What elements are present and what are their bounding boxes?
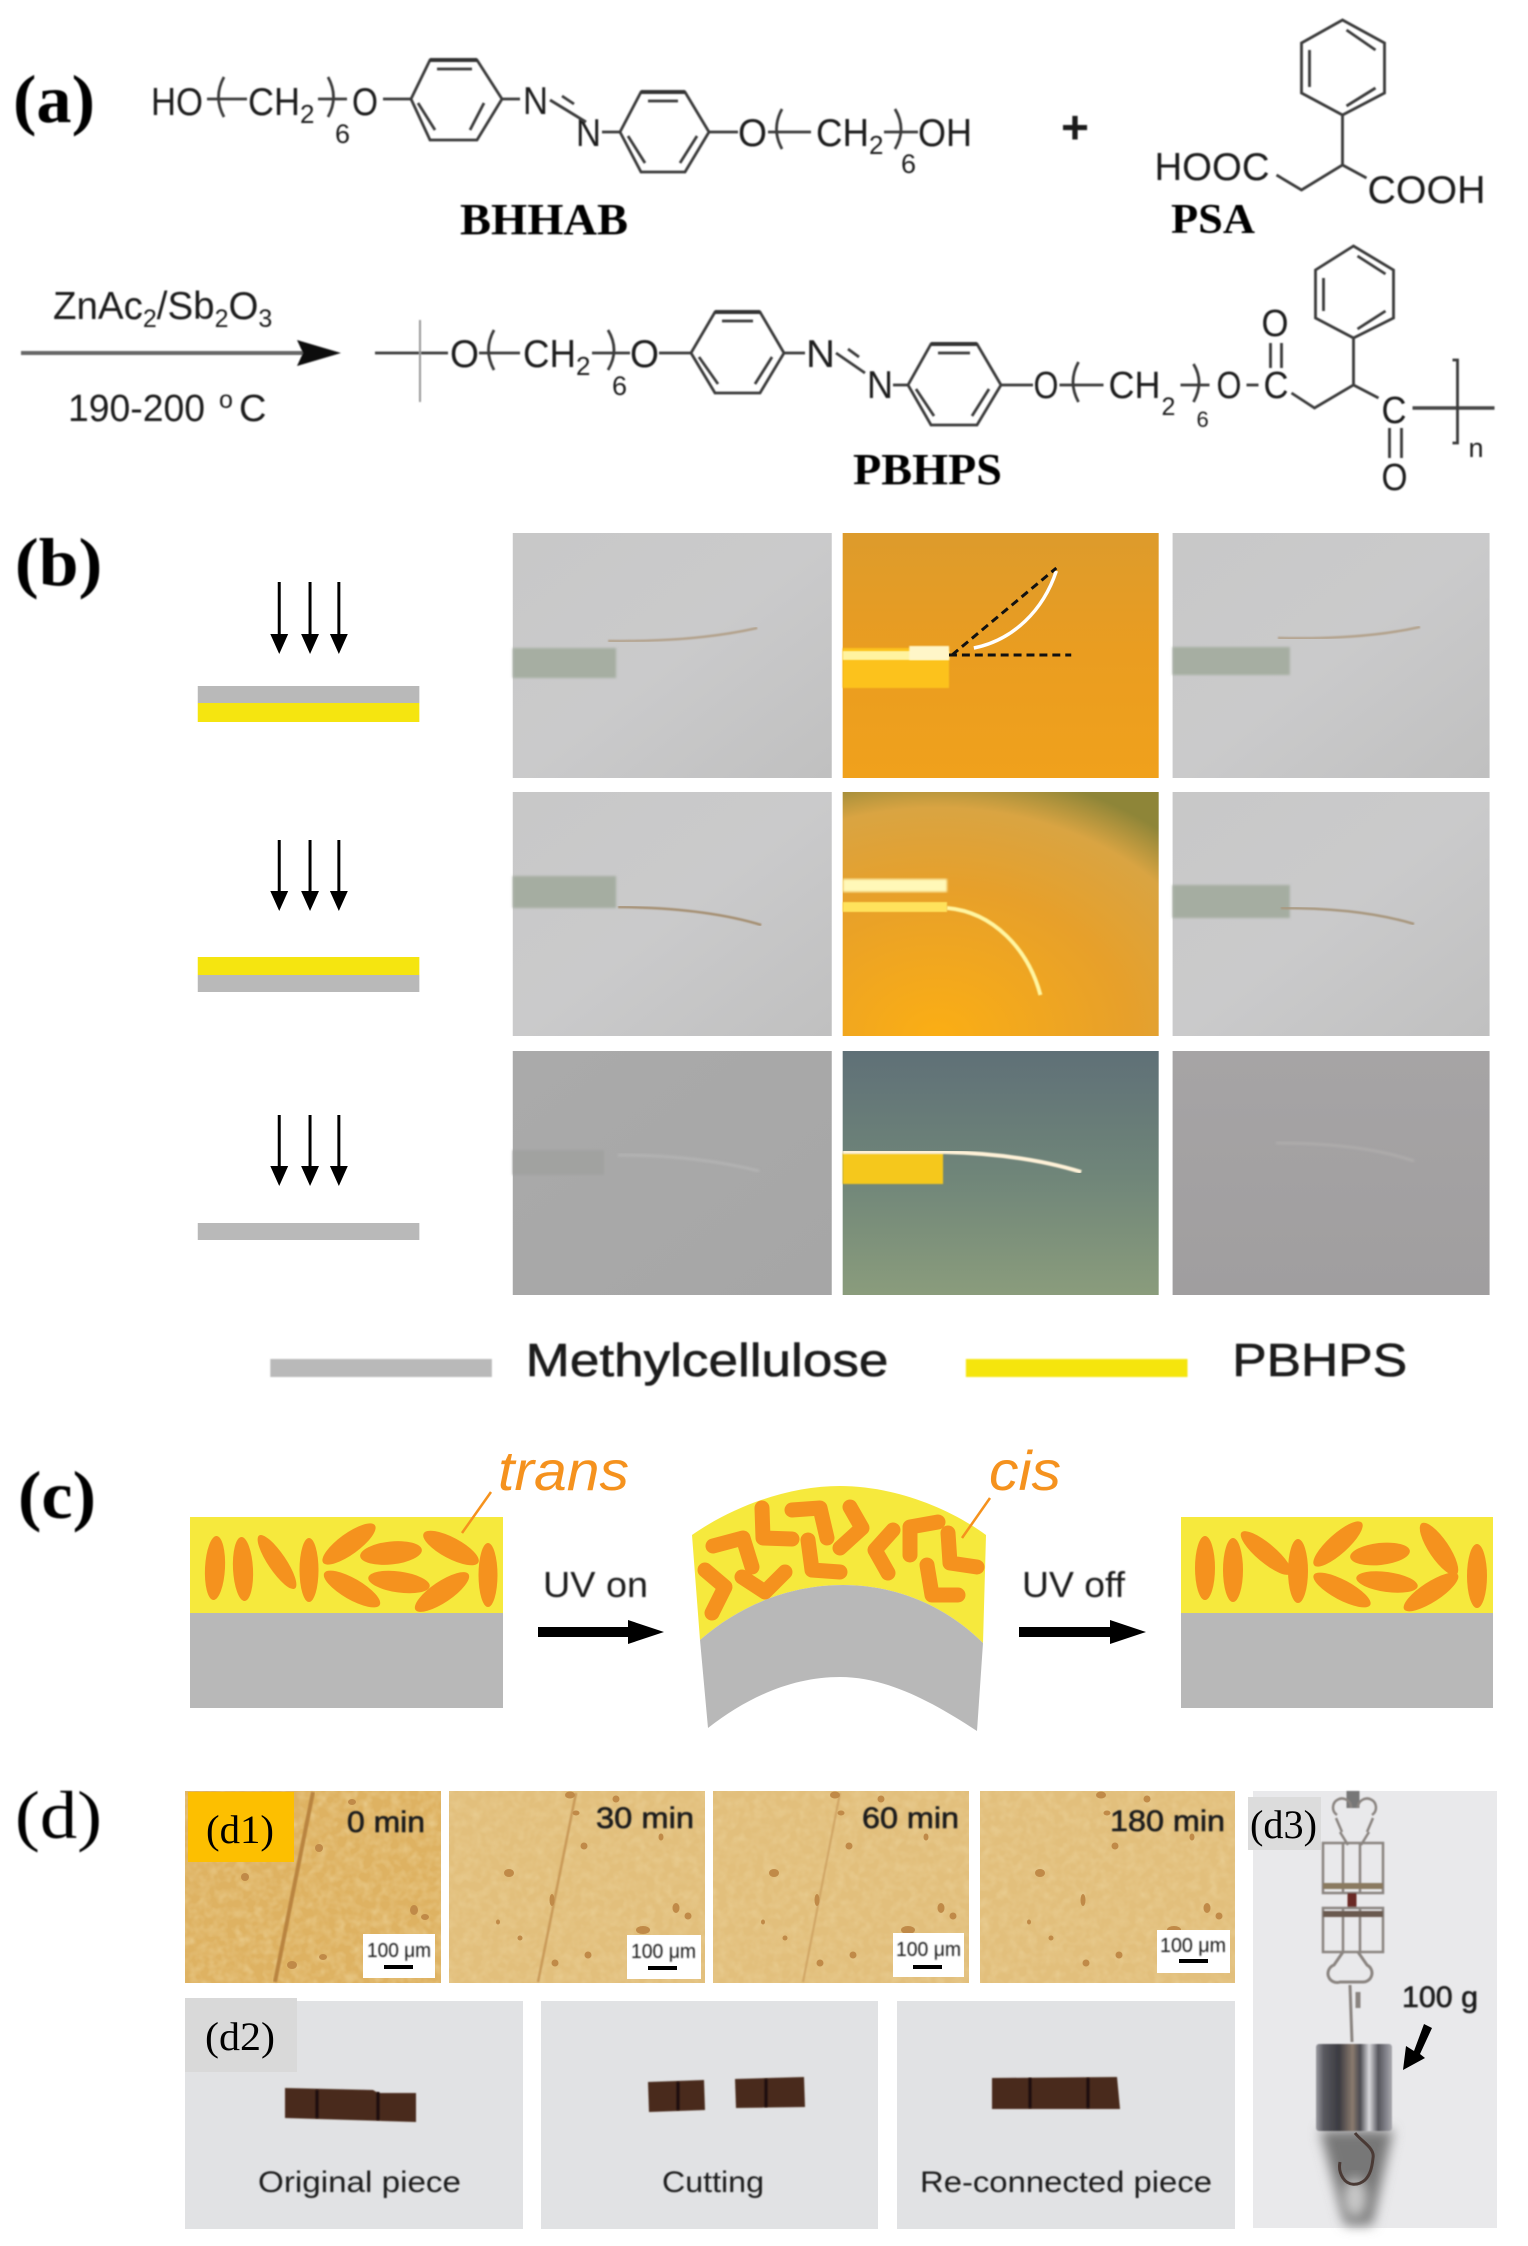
d1 micrograph 180 min <box>980 1791 1235 1983</box>
PBHPS structure <box>375 246 1494 499</box>
label trans with leader: trans <box>498 1439 629 1502</box>
panel d: self-healing <box>15 1777 1497 2229</box>
label PBHPS: PBHPS <box>853 445 1002 494</box>
PBHPS structure: O <box>1034 365 1058 407</box>
reaction arrow and conditions: 2 <box>143 305 157 333</box>
legend <box>270 1334 1407 1386</box>
BHHAB structure: 6 <box>335 119 350 149</box>
reaction arrow and conditions <box>21 285 341 430</box>
photo row 3 right <box>1173 1051 1490 1295</box>
reaction arrow and conditions: 2 <box>215 305 228 333</box>
label BHHAB: BHHAB <box>460 195 628 244</box>
UV on arrow <box>538 1564 664 1644</box>
reaction arrow and conditions: o <box>219 386 233 414</box>
UV on arrow: UV on <box>543 1564 648 1605</box>
BHHAB structure: N <box>523 80 548 123</box>
panel a: synthesis scheme <box>13 20 1494 499</box>
photo row 3 left <box>513 1051 832 1295</box>
label cis with leader: cis <box>989 1439 1061 1502</box>
BHHAB structure: O <box>738 112 767 155</box>
BHHAB structure: 2 <box>300 99 314 129</box>
plus sign: + <box>1061 101 1089 153</box>
reaction arrow and conditions: ZnAc <box>53 285 143 328</box>
BHHAB structure: 2 <box>869 130 883 160</box>
d2 cutting <box>541 2001 878 2229</box>
PBHPS structure: 2 <box>576 351 590 381</box>
d3 weight test photo: 100 g <box>1402 1981 1478 2014</box>
PBHPS structure: n <box>1468 433 1484 463</box>
reaction arrow and conditions: /Sb <box>157 285 215 328</box>
d2 cutting: Cutting <box>662 2166 764 2199</box>
PBHPS structure: O <box>1382 457 1408 499</box>
PBHPS structure: O <box>1216 365 1242 407</box>
d1 micrograph 180 min: 100 μm <box>1160 1935 1226 1957</box>
PBHPS structure: 6 <box>612 371 627 401</box>
d1 micrograph 0 min: 0 min <box>347 1806 425 1839</box>
photo row 2 left <box>513 792 832 1036</box>
d3 weight test photo <box>1248 1791 1497 2228</box>
PBHPS structure: CH <box>523 333 576 376</box>
BHHAB structure <box>151 60 972 179</box>
PBHPS structure: 6 <box>1196 407 1209 432</box>
d1 micrograph 30 min: 100 μm <box>631 1941 696 1963</box>
panel label d: (d) <box>15 1777 102 1853</box>
d2 re-connected piece: Re-connected piece <box>920 2166 1212 2199</box>
label trans with leader <box>462 1439 629 1533</box>
PBHPS structure: N <box>867 364 893 407</box>
d1 micrograph 0 min: 100 μm <box>367 1940 431 1962</box>
PBHPS structure: O <box>450 333 479 376</box>
BHHAB structure: HO <box>151 81 203 124</box>
BHHAB structure: OH <box>918 112 972 155</box>
label cis with leader <box>962 1439 1061 1538</box>
PBHPS structure: 2 <box>1162 393 1175 421</box>
right bilayer with trans molecules <box>1181 1515 1493 1708</box>
d1 micrograph 60 min <box>713 1791 969 1983</box>
d1 micrograph 60 min: 100 μm <box>896 1939 961 1961</box>
PBHPS structure: N <box>806 333 835 376</box>
PBHPS structure: C <box>1382 390 1406 432</box>
reaction arrow and conditions: 3 <box>258 305 272 333</box>
PBHPS structure: CH <box>1108 365 1160 407</box>
UV off arrow <box>1019 1564 1146 1644</box>
PSA structure: COOH <box>1368 169 1486 212</box>
panel c: trans-cis mechanism <box>18 1439 1493 1731</box>
BHHAB structure: CH <box>816 112 869 155</box>
photo row 1 left <box>513 533 832 778</box>
photo row 2 right <box>1173 792 1490 1036</box>
UV off arrow: UV off <box>1022 1564 1126 1605</box>
bent bilayer with cis molecules <box>692 1486 986 1731</box>
BHHAB structure: O <box>352 81 378 124</box>
panel label c: (c) <box>18 1457 96 1533</box>
row 3 UV arrows and bilayer <box>198 1115 419 1240</box>
panel label a: (a) <box>13 61 95 137</box>
label PSA: PSA <box>1171 197 1256 243</box>
d2 original piece <box>185 1998 523 2229</box>
d2 original piece: Original piece <box>258 2166 461 2199</box>
BHHAB structure: CH <box>248 81 300 124</box>
legend: PBHPS <box>1232 1334 1407 1386</box>
photo row 1 right <box>1173 533 1490 778</box>
d1 micrograph 30 min <box>449 1791 705 1983</box>
d2 original piece: (d2) <box>205 2014 275 2059</box>
row 1 UV arrows and bilayer <box>198 582 419 722</box>
panel label b: (b) <box>15 525 102 600</box>
BHHAB structure: N <box>576 112 601 155</box>
reaction arrow and conditions: O <box>228 285 258 328</box>
d1 micrograph 0 min <box>185 1791 441 1983</box>
d3 weight test photo: (d3) <box>1250 1802 1317 1847</box>
PSA structure <box>1154 20 1486 212</box>
photo row 2 middle: downward bend <box>843 792 1159 1036</box>
BHHAB structure: 6 <box>901 149 916 179</box>
photo row 1 middle: upward bend with angle <box>843 533 1159 778</box>
PBHPS structure: O <box>1262 303 1288 345</box>
reaction arrow and conditions: 190-200 <box>68 388 205 430</box>
d1 micrograph 180 min: 180 min <box>1110 1805 1225 1838</box>
d2 re-connected piece <box>897 2001 1235 2229</box>
reaction arrow and conditions: C <box>239 388 266 430</box>
PBHPS structure: O <box>630 333 659 376</box>
photo row 3 middle: no bend <box>843 1051 1159 1295</box>
left bilayer with trans molecules <box>190 1517 503 1708</box>
d1 micrograph 0 min: (d1) <box>206 1807 274 1852</box>
d1 micrograph 60 min: 60 min <box>862 1802 959 1835</box>
row 2 UV arrows and bilayer <box>198 840 419 992</box>
PSA structure: HOOC <box>1154 146 1270 189</box>
d1 micrograph 30 min: 30 min <box>596 1802 694 1835</box>
legend: Methylcellulose <box>526 1334 888 1386</box>
panel b: bending under UV <box>15 525 1490 1386</box>
PBHPS structure: C <box>1264 365 1288 407</box>
